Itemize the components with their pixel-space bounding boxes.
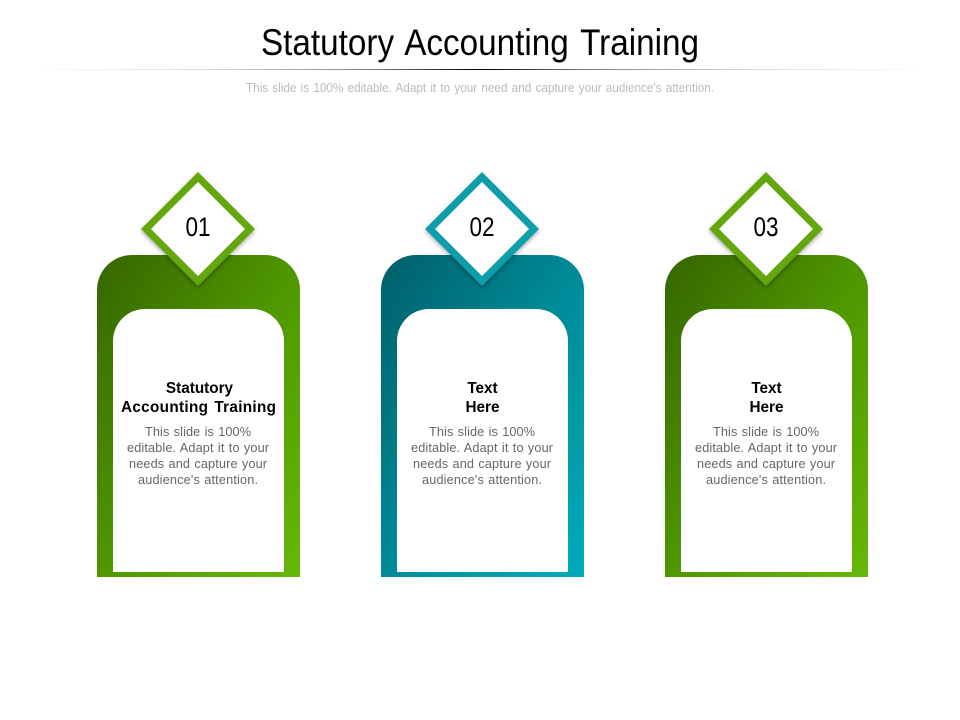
card 3 heading [749, 380, 784, 416]
card 1 heading: Statutory [166, 380, 234, 397]
card 3 body text: needs and capture your [697, 457, 836, 471]
title: Statutory Accounting Training [261, 22, 699, 63]
card 1 body text [127, 425, 270, 487]
card 2 body text: needs and capture your [413, 457, 552, 471]
card 3 body text: This slide is 100% [713, 425, 819, 439]
card 2 body text: audience's attention. [422, 473, 542, 487]
badge 02: 02 [470, 212, 494, 242]
card 1 body text: editable. Adapt it to your [127, 441, 270, 455]
card 3 heading: Text [751, 380, 782, 397]
card 2 heading: Text [467, 380, 498, 397]
card 3 body text: editable. Adapt it to your [695, 441, 838, 455]
card 2 body text: editable. Adapt it to your [411, 441, 554, 455]
badge 01: 01 [186, 212, 210, 242]
card 3 body text [695, 425, 838, 487]
card 1 body text: needs and capture your [129, 457, 268, 471]
subtitle: This slide is 100% editable. Adapt it to your need and capture your audience's attention. [246, 81, 714, 95]
card 2 heading [465, 380, 500, 416]
badge 03 [714, 177, 818, 281]
card 1 body text: This slide is 100% [145, 425, 251, 439]
badge 03: 03 [754, 212, 778, 242]
card 3 body text: audience's attention. [706, 473, 826, 487]
card 1 background [97, 255, 300, 577]
card 2 background [381, 255, 584, 577]
card 2 inner panel [397, 309, 568, 572]
card 1 heading [121, 380, 276, 416]
card 3 heading: Here [749, 399, 784, 416]
card 3 background [665, 255, 868, 577]
badge 01 [146, 177, 250, 281]
card 2 body text: This slide is 100% [429, 425, 535, 439]
card 3 inner panel [681, 309, 852, 572]
card 2 body text [411, 425, 554, 487]
card 1 heading: Accounting Training [121, 399, 276, 416]
card 1 body text: audience's attention. [138, 473, 258, 487]
panel: card 2 [381, 177, 584, 577]
badge 02 [430, 177, 534, 281]
panel: card 1 [97, 177, 300, 577]
card 1 inner panel [113, 309, 284, 572]
panel: card 3 [665, 177, 868, 577]
card 2 heading: Here [465, 399, 500, 416]
